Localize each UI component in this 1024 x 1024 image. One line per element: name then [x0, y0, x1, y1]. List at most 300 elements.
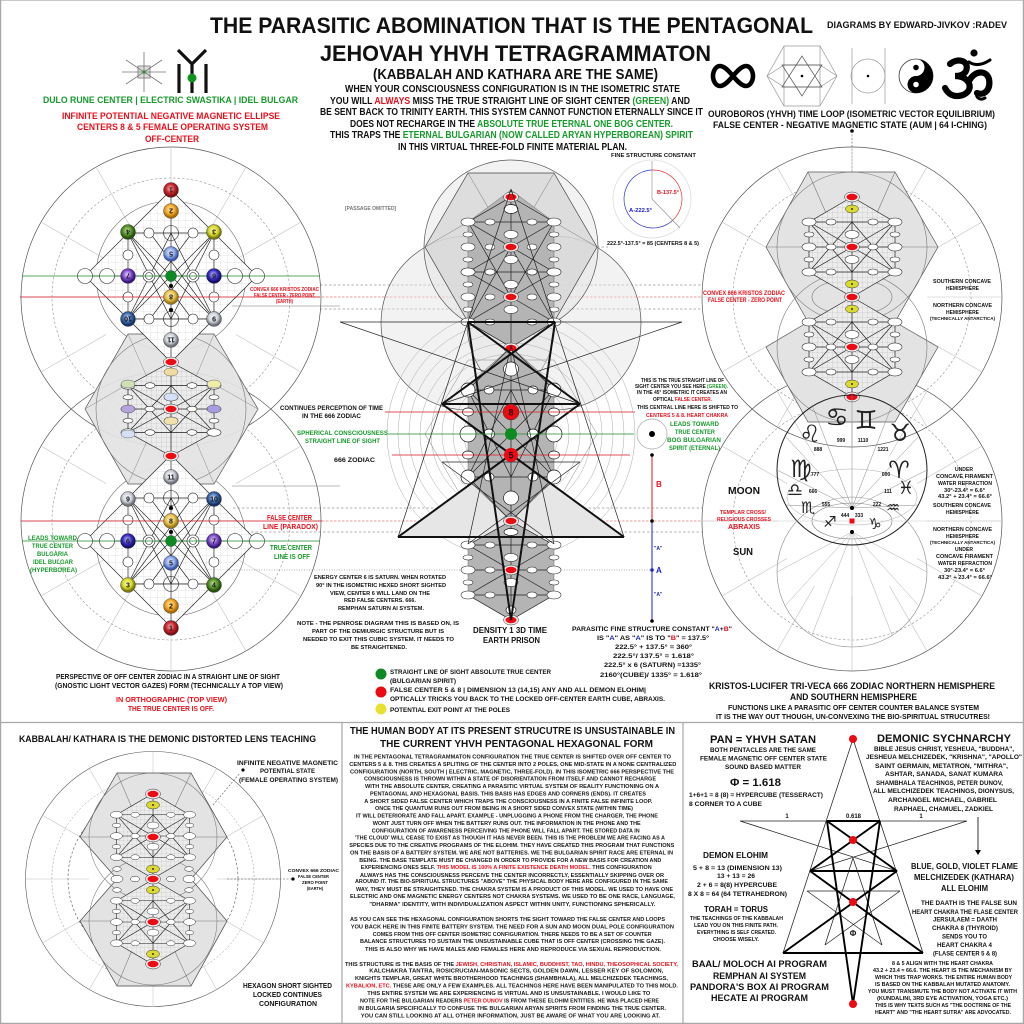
lower sphere numbers: 10	[210, 496, 218, 504]
right diagram caption: FUNCTIONS LIKE A PARASITIC OFF CENTER COUNTER BALANCE SYSTEM	[728, 705, 979, 712]
panel: kabbalah lens: HEXAGON SHORT SIGHTED	[243, 983, 332, 990]
right diagram annotations: WATER REFRACTION	[938, 481, 992, 487]
left diagram caption: IN ORTHOGRAPHIC (TOP VIEW)	[116, 697, 227, 704]
legend	[376, 668, 665, 714]
right diagram caption	[709, 681, 995, 721]
fine structure constant diagram	[607, 153, 699, 247]
icon: yin yang	[899, 59, 933, 93]
panel: kabbalah lens: POTENTIAL STATE	[260, 768, 316, 775]
panel: human body text: BALANCE STRUCTURES TO SUSTAIN THE UNSUSTAINABLE CUBE THAT IS OFF CENTER (CROSSING THE GAZE).	[360, 939, 665, 945]
left diagram annotations: (EARTH)	[276, 299, 293, 305]
intro text block: IN THIS VIRTUAL THREE-FOLD FINITE MATERIAL PLAN.	[398, 142, 627, 153]
central annotations left: PART OF THE DEMIURGIC STRUCTURE BUT IS	[312, 629, 445, 635]
thin star	[340, 189, 682, 544]
left text: FEMALE MAGNETIC OFF CENTER STATE	[700, 756, 828, 762]
zodiac numbers: 222	[873, 502, 881, 508]
right diagram annotations: HEMISPHERE	[946, 310, 980, 316]
A and B ratio bar: "A"	[654, 592, 663, 598]
upper sphere numbers: 5	[169, 250, 173, 256]
right diagram annotations: SOUTHERN CONCAVE	[933, 503, 992, 509]
lower lattice	[78, 455, 264, 627]
central annotations left: CONTINUES PERCEPTION OF TIME	[280, 405, 384, 412]
right diagram annotations: TEMPLAR CROSS/	[720, 510, 767, 516]
legend: POTENTIAL EXIT POINT AT THE POLES	[390, 707, 511, 714]
center lines	[20, 276, 340, 541]
zodiac numbers: 777	[811, 472, 819, 478]
panel: human body text: YOU BACK HERE IN THIS FINITE BATTERY SYSTEM. THE NEED FOR A SUN AND MOON DUAL POLE CONFIGURATION	[351, 924, 674, 930]
upper sphere numbers: 4	[126, 228, 130, 234]
panel: human body text: KYBALION, ETC. THESE ARE ONLY A FEW EXAMPLES. ALL TEACHINGS HERE HAVE BEEN MANIPULATED TO THIS MOLD.	[346, 984, 678, 990]
panel: human body text: IT WILL DETERIORATE AND FALL APART. EXAMPLE - UNPLUGGING A PHONE FROM THE CHARGER, THE PHONE	[356, 814, 658, 820]
panel: kabbalah lens: LOCKED CONTINUES	[253, 992, 322, 999]
panel: kabbalah lens: CONFIGURATION	[259, 1001, 317, 1008]
right diagram annotations	[703, 279, 996, 581]
central annotations left: SPHERICAL CONSCIOUSNESS	[297, 430, 389, 437]
central annotations left: NOTE - THE PENROSE DIAGRAM THIS IS BASED ON, IS	[297, 621, 460, 627]
A and B ratio bar: B	[656, 480, 662, 489]
right diagram annotations: WATER REFRACTION	[938, 561, 992, 567]
upper sphere numbers: 7	[126, 272, 130, 278]
cells	[809, 197, 895, 297]
lower sphere numbers: 1	[169, 626, 173, 632]
panel: kabbalah lens: CONVEX 666 ZODIAC	[288, 868, 340, 873]
left text: 8 CORNER TO A CUBE	[689, 802, 762, 808]
right text: ALL MELCHIZEDEK TEACHINGS, DIONYSUS,	[873, 789, 1014, 795]
panel: human body text: EXPERIENCING ONES SELF. THIS MODEL IS 100% A FINITE EXISTENCE DEATH MODEL. THIS CONFIGURATION	[361, 865, 652, 871]
right diagram caption: IT IS THE WAY OUT THOUGH, UN-CONVEXING THE BIO-SPIRITUAL STRUCUTRES!	[716, 714, 990, 721]
left diagram annotations: (HYPERBOREA)	[30, 567, 77, 574]
upper sphere numbers	[124, 186, 216, 342]
panel: human body text: THIS STRUCTURE IS THE BASIS OF THE JEWISH, CHRISTIAN, ISLAMIC, BUDDHIST, TAO, HINDU, THEOSOPHICAL SOCIETY,	[345, 962, 678, 968]
central annotations right	[635, 378, 738, 452]
body text: IN THE PENTAGONAL TETRAGRAMMATON CONFIGURATION THE TRUE CENTER IS SHIFTED OVER OFF CENTER TO	[354, 754, 671, 760]
parasitic constant text: 2160°(CUBE)/ 1335° = 1.618°	[600, 671, 702, 679]
right diagram annotations: HEMISPHERE	[946, 510, 980, 516]
panel: human body text: "DHARMA" IDENTITY, WITH INDIVIDUALIZATION ASPECT WITHIN UNITY, FUNCTIONING SPHERICALLY.	[369, 902, 656, 908]
thick star	[398, 322, 624, 620]
lower pale circle	[777, 497, 927, 647]
right diagram annotations: MOON	[728, 486, 760, 497]
panel: kabbalah lens: FALSE CENTER	[298, 874, 330, 879]
panel: human body text: WONT JUST TURN OFF WHEN THE BATTERY RUNS OUT. THE INFORMATION IN THE PHONE AND THE	[373, 821, 641, 827]
right text: ASHTAR, SANADA, SANAT KUMARA	[885, 772, 1004, 778]
panel: central pentagram diagram	[340, 160, 682, 625]
right text: HEART" AND "THE HEART SUTRA" ARE ADVOCATED.	[875, 1010, 1012, 1016]
central annotations right: LEADS TOWARD	[670, 422, 720, 428]
zodiac numbers	[809, 438, 892, 519]
panel: human body text: THE CURRENT YHVH PENTAGONAL HEXAGONAL FORM	[380, 739, 653, 750]
long horizontal guide lines	[214, 247, 702, 570]
central annotations right: THIS CENTRAL LINE HERE IS SHIFTED TO	[637, 405, 738, 411]
panel: human body text: SPECIES DUE TO THE CREATIVE PROGRAMS OF THE ELOHIM. THEY HAVE CREATED THIS PROGRAM THAT FUNCTIONS	[349, 843, 674, 849]
left diagram annotations: LEADS TOWARD	[28, 535, 77, 542]
panel: human body text: YOU CAN STILL LOOKING AT ALL OTHER INFORMATION, JUST BE AWARE OF WHAT YOU ARE LOOKING AT.	[361, 1014, 660, 1020]
right diagram annotations: UNDER	[955, 547, 973, 553]
lower sphere numbers: 4	[212, 582, 216, 590]
ratios: Φ	[850, 929, 857, 938]
intro text block: YOU WILL ALWAYS MISS THE TRUE STRAIGHT LINE OF SIGHT CENTER (GREEN) AND	[330, 96, 690, 107]
left text: LEAD YOU ON THIS FINITE PATH.	[694, 923, 779, 929]
central annotations right: SIGHT CENTER YOU SEE HERE (GREEN).	[635, 384, 729, 390]
left text: THE TEACHINGS OF THE KABBALAH	[690, 916, 783, 922]
zodiac numbers: 1110	[858, 438, 869, 444]
panel: human body text: CONFIGURATION OF AWARENESS PERCEIVING THE PHONE WILL FALL APART. THE STORED DATA IN	[372, 828, 640, 834]
panel: human body text: ON THE BASIS OF A BATTERY SYSTEM. WE ARE NOT BATTERIES. WE THE BULGARIAN SPIRIT RACE ARE ETERNAL IN	[350, 850, 673, 856]
panel: human body text: NOTE FOR THE BULGARIAN READERS PETER DUNOV IS FROM THESE ELOHIM ENTITIES. HE WAS PLACED HERE	[360, 998, 659, 1004]
zodiac glyphs: ♓	[898, 478, 914, 499]
lower sphere numbers: 6	[126, 538, 130, 546]
right diagram annotations: NORTHERN CONCAVE	[933, 303, 993, 309]
right diagram annotations: CONCAVE FIRAMENT	[936, 474, 993, 480]
left text: 2 + 6 = 8(8) HYPERCUBE	[697, 883, 777, 889]
panel: pan pentagram	[688, 733, 1022, 1016]
fine structure constant diagram: 222.5°-137.5° = 85 (CENTERS 8 & 5)	[607, 241, 699, 247]
lower light triangle	[398, 455, 624, 537]
left diagram caption: (GNOSTIC LIGHT VECTOR GAZES) FORM (TECHNICALLY A TOP VIEW)	[55, 683, 283, 690]
right text: THE DAATH IS THE FALSE SUN	[921, 901, 1017, 907]
zodiac numbers: 000	[882, 472, 890, 478]
dark body	[468, 190, 554, 620]
upper numbered spheres	[120, 182, 222, 348]
zodiac glyphs: ♉	[889, 419, 911, 447]
right text: WHICH THIS TRAP WORKS. THE ENTIRE HUMAN BODY	[875, 975, 1013, 981]
heading: KABBALAH/ KATHARA IS THE DEMONIC DISTORTED LENS TEACHING	[19, 734, 316, 744]
panel: human body text: 'THE CLOUD' WILL CEASE TO EXIST AS THOUGH IT HAS NEVER BEEN. THIS IS THE PROBLEM WE ARE FACING AS A	[355, 836, 666, 842]
left text	[688, 734, 829, 1003]
center nodes: 5	[508, 450, 514, 460]
fine structure constant diagram: A-222.5°	[629, 208, 652, 214]
panel: kabbalah lens: ZERO POINT	[302, 880, 328, 885]
zodiac numbers: 333	[855, 513, 863, 519]
right diagram annotations: CONVEX 666 KRISTOS ZODIAC	[703, 291, 786, 297]
white nodes	[460, 204, 562, 614]
zodiac numbers: 555	[822, 502, 830, 508]
right text: MELCHIZEDEK (KATHARA)	[914, 873, 1014, 882]
intro text block: DOES NOT RECHARGE IN THE ABSOLUTE TRUE ETERNAL ONE BOG CENTER.	[350, 119, 673, 130]
panel: kabbalah lens: INFINITE NEGATIVE MAGNETIC	[237, 760, 338, 767]
panel: human body text: THIS ENTIRE SYSTEM WE ARE EXPERIENCING IS VIRTUAL AND IS UNSUSTAINABLE. I WOULD LIKE TO	[367, 991, 651, 997]
right text: (KUNDALINI, 3RD EYE ACTIVATION, YOGA ETC.)	[877, 996, 1008, 1002]
zodiac numbers: 111	[884, 489, 892, 495]
central annotations right: SPIRIT (ETERNAL)	[669, 446, 720, 452]
central annotations right: TRUE CENTER	[675, 430, 716, 436]
left text: EVERYTHING IS SELF CREATED.	[697, 930, 777, 936]
parasitic constant text: 222.5°/ 137.5° = 1.618°	[613, 652, 694, 660]
upper sphere numbers: 1	[169, 186, 173, 192]
right text: JERSULAEM = DAATH	[933, 918, 997, 924]
ratios: 0.618	[846, 814, 862, 820]
panel: human body text: ALWAYS HAS THE CONSCIOUSNESS PERCEIVE THE CENTER INCORRECTLY, ESSENTIALLY SKIPPING OVER OR	[360, 873, 665, 879]
central annotations left: STRAIGHT LINE OF SIGHT	[305, 438, 380, 445]
zodiac glyphs: ♋	[825, 403, 849, 433]
legend: OPTICALLY TRICKS YOU BACK TO THE LOCKED OFF-CENTER EARTH CUBE, ABRAXIS.	[390, 696, 665, 703]
callouts	[213, 773, 293, 879]
upper lattice	[78, 190, 264, 362]
central annotations right: THIS IS THE TRUE STRAIGHT LINE OF	[641, 378, 724, 384]
left text: PANDORA'S BOX AI PROGRAM	[690, 982, 829, 992]
right diagram annotations: UNDER	[955, 467, 973, 473]
panel: human body text: KNIGHTS TEMPLAR, GREAT WHITE BROTHERHOOD TEACHINGS (SHAMBHALA), ALL MELCHIZEDEK TEACHINGS,	[355, 976, 668, 982]
lower sphere numbers	[126, 474, 218, 632]
panel: human body text: PENTAGONAL AND HEXAGONAL BASIS. THIS BASIS HAS EDGES AND CORNERS (ENDS). IT CREATES	[370, 791, 646, 797]
legend: FALSE CENTER 5 & 8 | DIMENSION 13 (14,15) ANY AND ALL DEMON ELOHIM|	[390, 687, 646, 694]
right diagram annotations: RELIGIOUS CROSSES	[717, 517, 772, 523]
right diagram annotations: SUN	[733, 547, 753, 558]
upper sphere numbers: 10	[124, 314, 132, 322]
right diagram annotations: HEMISPHERE	[946, 286, 980, 292]
upper sphere numbers: 6	[212, 272, 216, 278]
left text: TORAH = TORUS	[704, 905, 769, 914]
panel: human body text: IN BULGARIA SPECIFICALLY TO CONFUSE THE BULGARIAN ARYAN SPIRITS FROM FINDING THE TRUE CENTER.	[358, 1006, 666, 1012]
icon: om	[945, 49, 990, 99]
intro text block	[320, 84, 703, 153]
zodiac glyphs: ♎	[787, 480, 803, 501]
panel: human body text: AROUND IT. THE BIO-SPIRITUAL STRUCTURES "ABOVE" THE PHYSICAL BODY HERE ARE CONFIGURED IN THE SAME	[355, 879, 668, 885]
intro text block: WHEN YOUR CONSCIOUSNESS CONFIGURATION IS IN THE ISOMETRIC STATE	[345, 84, 680, 95]
zodiac numbers: 1221	[877, 447, 889, 453]
central annotations right: BOG BULGARIAN	[667, 438, 721, 444]
thin star	[740, 739, 967, 953]
lower sphere numbers: 2	[169, 604, 173, 610]
heading: THE HUMAN BODY AT ITS PRESENT STRUCUTRE IS UNSUSTAINABLE IN	[350, 726, 675, 737]
central annotations left: ENERGY CENTER 6 IS SATURN. WHEN ROTATED	[314, 575, 446, 581]
left text: 5 + 8 = 13 (DIMENSION 13)	[693, 866, 782, 872]
right text: SENDS YOU TO	[942, 934, 987, 940]
panel: human body text: THIS IS ALSO WHY WE HAVE MALES AND FEMALES HERE AND REPRODUCE VIA SEXUAL REPRODUCTION.	[365, 947, 661, 953]
zodiac glyphs: ♌	[799, 420, 821, 448]
legend: (BULGARIAN SPIRIT)	[390, 678, 456, 685]
A and B ratio bar: "A"	[654, 546, 663, 552]
right diagram annotations: FALSE CENTER - ZERO POINT	[708, 298, 782, 304]
lower sphere numbers: 3	[126, 582, 130, 590]
left text: BOTH PENTACLES ARE THE SAME	[710, 747, 817, 754]
central annotations right: CENTERS 5 & 8. HEART CHAKRA	[646, 413, 728, 419]
panel: human body text: CONSCIOUSNESS IS THROWN WITHIN A STATE OF DISORIENTATION FROM ITSELF AND CANNOT RECHARGE	[364, 777, 656, 783]
parasitic constant text	[572, 626, 732, 679]
arrow	[975, 817, 981, 855]
central annotations left: RED FALSE CENTERS. 666.	[344, 598, 417, 604]
left text: 1+6+1 = 8 (8) = HYPERCUBE (TESSERACT)	[689, 793, 823, 799]
outer circles	[381, 160, 641, 410]
central annotations left: VIEW, CENTER 6 WILL LAND ON THE	[330, 591, 431, 597]
left text: Φ = 1.618	[730, 777, 781, 789]
left heading: OFF-CENTER	[145, 134, 199, 144]
fine structure constant diagram: B-137.5°	[657, 190, 679, 196]
right text: (FLASE CENTER 5 & 8)	[933, 952, 997, 958]
left text: SOUND BASED MATTER	[725, 764, 801, 771]
right text: YOU MUST TRANSMUTE THE BODY NOT ACTIVATE IT WITH	[868, 989, 1017, 995]
right text: 43.2 + 23.4 = 66.6. THE HEART IS THE MECHANISM BY	[873, 968, 1013, 974]
zodiac glyphs: ♐	[823, 513, 837, 531]
lattice lines	[468, 190, 554, 620]
icon: hexagon star	[767, 46, 837, 106]
right text: DEMONIC SYCHNARCHY	[877, 733, 1012, 745]
left text: CHOOSE WISELY.	[713, 937, 760, 943]
icon: dulo rune	[178, 50, 206, 93]
left text: DEMON ELOHIM	[703, 851, 768, 860]
panel: human body text: WAY, THEY MUST BE STRAIGHTENED. THE CHAKRA SYSTEM IS A PRODUCT OF THIS MODEL. WE USED TO HAVE ONE	[356, 887, 673, 893]
intro text block: BE SENT BACK TO TRINITY EARTH. THIS SYSTEM CANNOT FUNCTION ETERNALLY SINCE IT	[320, 107, 703, 118]
right diagram annotations: NORTHERN CONCAVE	[933, 527, 993, 533]
right text: JESHEUA MELCHIZEDEK, "KRISHNA", "APOLLO"	[866, 755, 1022, 761]
right text: RAPHAEL, CHAMUEL, ZADKIEL	[894, 807, 993, 813]
right text: ARCHANGEL MICHAEL, GABRIEL	[888, 798, 997, 804]
panel: human body text: KALCHAKRA TANTRA, ROSICRUCIAN-MASONIC SECTS, GOLDEN DAWN, LESSER KEY OF SOLOMON,	[369, 968, 664, 974]
right heading: FALSE CENTER - NEGATIVE MAGNETIC STATE (AUM | 64 I-CHING)	[713, 120, 987, 130]
lower sphere numbers: 11	[167, 474, 175, 482]
right text	[866, 733, 1022, 1016]
left diagram annotations: LINE (PARADOX)	[263, 524, 318, 531]
zodiac numbers: 444	[841, 513, 849, 519]
zodiac glyphs: ♊	[854, 406, 878, 436]
A and B ratio bar	[637, 419, 667, 623]
upper sphere numbers: 9	[212, 314, 216, 322]
left diagram annotations: TRUE CENTER	[32, 543, 73, 550]
left text: BAAL/ MOLOCH AI PROGRAM	[692, 959, 827, 969]
upper sphere numbers: 2	[169, 206, 173, 214]
red nodes	[849, 735, 857, 1008]
center nodes: 8	[508, 408, 514, 418]
right text: BLUE, GOLD, VIOLET FLAME	[911, 862, 1019, 871]
panel: right zodiac diagram	[702, 129, 1002, 671]
right text: SAINT GERMAIN, METATRON, "MITHRA",	[875, 764, 1008, 770]
panel: human body text: CONFIGURATION (NORTH, SOUTH | ELECTRIC, MAGNETIC, THREE-FOLD). IN THIS ISOMETRIC 666 PERSPECTIVE THE	[350, 769, 674, 775]
right text: BIBLE JESUS CHRIST, YESHEUA, "BUDDHA",	[874, 747, 1014, 753]
hexagon	[85, 334, 258, 484]
left diagram annotations	[28, 287, 319, 574]
left diagram annotations: CONVEX 666 KRISTOS ZODIAC	[250, 287, 319, 293]
central annotations left: 90° IN THE ISOMETRIC HEXED SHORT SIGHTED	[316, 583, 446, 589]
central caption: DENSITY 1 3D TIME	[473, 626, 548, 635]
panel: kabbalah lens: (FEMALE OPERATING SYSTEM)	[239, 777, 338, 784]
hexagons	[766, 172, 938, 422]
left heading: DULO RUNE CENTER | ELECTRIC SWASTIKA | IDEL BULGAR	[43, 95, 298, 105]
left text: HECATE AI PROGRAM	[711, 993, 808, 1003]
title: THE PARASITIC ABOMINATION THAT IS THE PENTAGONAL	[210, 13, 813, 38]
lower sphere numbers: 9	[126, 496, 130, 504]
right diagram caption: AND SOUTHERN HEMISPHERE	[790, 692, 917, 702]
parasitic constant text: 222.5° + 137.5° = 360°	[615, 643, 692, 651]
center nodes	[503, 404, 519, 462]
right text: SHAMBHALA TEACHINGS, PETER DUNOV,	[876, 781, 1003, 787]
left heading	[43, 95, 298, 144]
right diagram annotations: 43.2° + 23.4° = 66.6°	[938, 575, 992, 581]
right diagram annotations: (TECHNICALLY ANTARCTICA)	[930, 316, 996, 321]
central annotations left: 666 ZODIAC	[334, 457, 375, 464]
right text: ALL ELOHIM	[941, 884, 988, 893]
icon: neutral geometric mark	[122, 52, 166, 92]
central annotations left: IN THE 666 ZODIAC	[302, 413, 361, 420]
right diagram annotations: 30°-23.4° = 6.6°	[944, 568, 985, 574]
panel: left zodiac diagram	[20, 147, 340, 671]
parasitic constant text: 222.5° x 6 (SATURN) =1335°	[604, 661, 701, 669]
center lines	[385, 412, 635, 455]
right diagram annotations: SOUTHERN CONCAVE	[933, 279, 992, 285]
left diagram annotations: FALSE CENTER	[267, 515, 312, 522]
central annotations left: BE STRAIGHTENED.	[351, 645, 408, 651]
title: JEHOVAH YHVH TETRAGRAMMATON	[320, 41, 711, 66]
title: (KABBALAH AND KATHARA ARE THE SAME)	[373, 66, 658, 83]
title	[210, 13, 813, 83]
cells	[110, 794, 196, 878]
parasitic constant text: PARASITIC FINE STRUCTURE CONSTANT " A+B"	[572, 626, 732, 633]
right diagram annotations: CONCAVE FIRAMENT	[936, 554, 993, 560]
parasitic constant text: IS "A" AS " A" IS TO " B" = 137.5°	[597, 634, 709, 642]
central annotations left	[280, 405, 460, 651]
right text: CHAKRA 8 (THYROID)	[932, 926, 998, 932]
omitted passage note: [PASSAGE OMITTED]	[345, 206, 397, 212]
right text: THIS IS WHY TEXTS SUCH AS "THE DOCTRINE OF THE	[875, 1003, 1012, 1009]
right diagram caption: KRISTOS-LUCIFER TRI-VECA 666 ZODIAC NORTHERN HEMISPHERE	[709, 681, 995, 691]
panel: human body text: CENTERS 5 & 8. THIS CREATES A SPLITING OF THE CENTER INTO 2 POLES, ONE MID-STATE IN A NONE CENTRALIZED	[349, 762, 676, 768]
right text: HEART CHAKRA 4	[937, 943, 993, 949]
middle row nodes	[111, 867, 195, 892]
lower numbered spheres	[120, 470, 222, 636]
right text: HEART CHAKRA THE FLASE CENTER	[912, 910, 1019, 916]
zodiac glyphs: ♑	[868, 515, 882, 533]
fine structure constant diagram: FINE STRUCTURE CONSTANT	[611, 153, 696, 159]
intro text block: THIS TRAPS THE ETERNAL BULGARIAN (NOW CALLED ARYAN HYPERBOREAN) SPIRIT	[330, 130, 693, 141]
zodiac glyphs: ♏	[801, 498, 815, 517]
left diagram annotations: FALSE CENTER - ZERO POINT	[254, 293, 315, 299]
left diagram annotations: IDEL BULGAR	[33, 559, 73, 566]
left heading: INFINITE POTENTIAL NEGATIVE MAGNETIC ELLIPSE	[62, 111, 280, 121]
icon: circle dot	[851, 48, 885, 104]
right heading: OUROBOROS (YHVH) TIME LOOP (ISOMETRIC VECTOR EQUILIBRIUM)	[708, 109, 995, 119]
panel: human body text: COMES FROM THIS OFF CENTER ISOMETRIC CONFIGURATION. THERE NEEDS TO BE A SET OF COUNTER	[373, 932, 652, 938]
concentric rings	[387, 310, 635, 558]
ratios	[785, 814, 923, 938]
central annotations left: REMPHAN SATURN AI SYSTEM.	[338, 606, 425, 612]
credit: DIAGRAMS BY EDWARD-JIVKOV :RADEV	[827, 20, 1007, 30]
lower sphere numbers: 8	[169, 518, 173, 526]
upper sphere numbers: 3	[212, 228, 216, 234]
left diagram annotations: TRUE CENTER	[270, 545, 312, 552]
left diagram caption	[55, 674, 283, 713]
lower sphere numbers: 7	[212, 538, 216, 546]
left heading: CENTERS 8 & 5 FEMALE OPERATING SYSTEM	[77, 122, 268, 132]
upper hexagon	[425, 173, 597, 322]
panel: human body text	[345, 726, 678, 1020]
lower sphere numbers: 5	[169, 560, 173, 568]
left diagram caption: PERSPECTIVE OF OFF CENTER ZODIAC IN A STRAIGHT LINE OF SIGHT	[56, 674, 281, 681]
zodiac numbers: 888	[814, 447, 822, 453]
left diagram annotations: BULGARIA	[37, 551, 68, 558]
panel: human body text: A SHORT SIDED FALSE CENTER WHICH TRAPS THE CONSCIOUSNESS IN A FINITE FALSE INFINITE LOOP.	[364, 799, 653, 805]
right text: IS BASED ON THE KABBALAH MUTATED ANATOMY.	[875, 982, 1011, 988]
ratios: 1	[785, 814, 789, 820]
zodiac numbers: 999	[837, 438, 845, 444]
zodiac glyphs: ♒	[886, 498, 900, 517]
left diagram caption: THE TRUE CENTER IS OFF.	[128, 706, 214, 713]
left diagram annotations: LINE IS OFF	[274, 554, 311, 561]
zodiac glyphs	[787, 403, 914, 533]
panel: human body text: ONCE THE QUANTUM RUNS OUT FROM BEING IN A SHORT SIDED CONVEX STATE (WITHIN TIME)	[375, 806, 633, 812]
central caption: EARTH PRISON	[483, 636, 540, 645]
panel: human body text: AS YOU CAN SEE THE HEXAGONAL CONFIGURATION SHORTS THE SIGHT TOWARD THE FALSE CENTER AND LOOPS	[350, 917, 665, 923]
central caption	[473, 626, 548, 645]
upper sphere numbers: 8	[169, 292, 173, 300]
right diagram annotations: 43.2° + 23.4° = 66.6°	[938, 494, 992, 500]
right diagram annotations: HEMISPHERE	[946, 534, 980, 540]
right heading	[708, 109, 995, 130]
left text: REMPHAN AI SYSTEM	[713, 971, 806, 981]
A and B ratio bar: A	[656, 566, 662, 575]
zodiac numbers: 666	[809, 489, 817, 495]
zodiac glyphs: ♈	[888, 456, 910, 484]
panel: human body text: WITH THE ABSOLUTE CENTER, CREATING A PARASITIC VIRTUAL SYSTEM OF REALITY FUNCTIONING ON A	[365, 784, 660, 790]
legend: STRAIGHT LINE OF SIGHT ABSOLUTE TRUE CENTER	[390, 669, 551, 676]
